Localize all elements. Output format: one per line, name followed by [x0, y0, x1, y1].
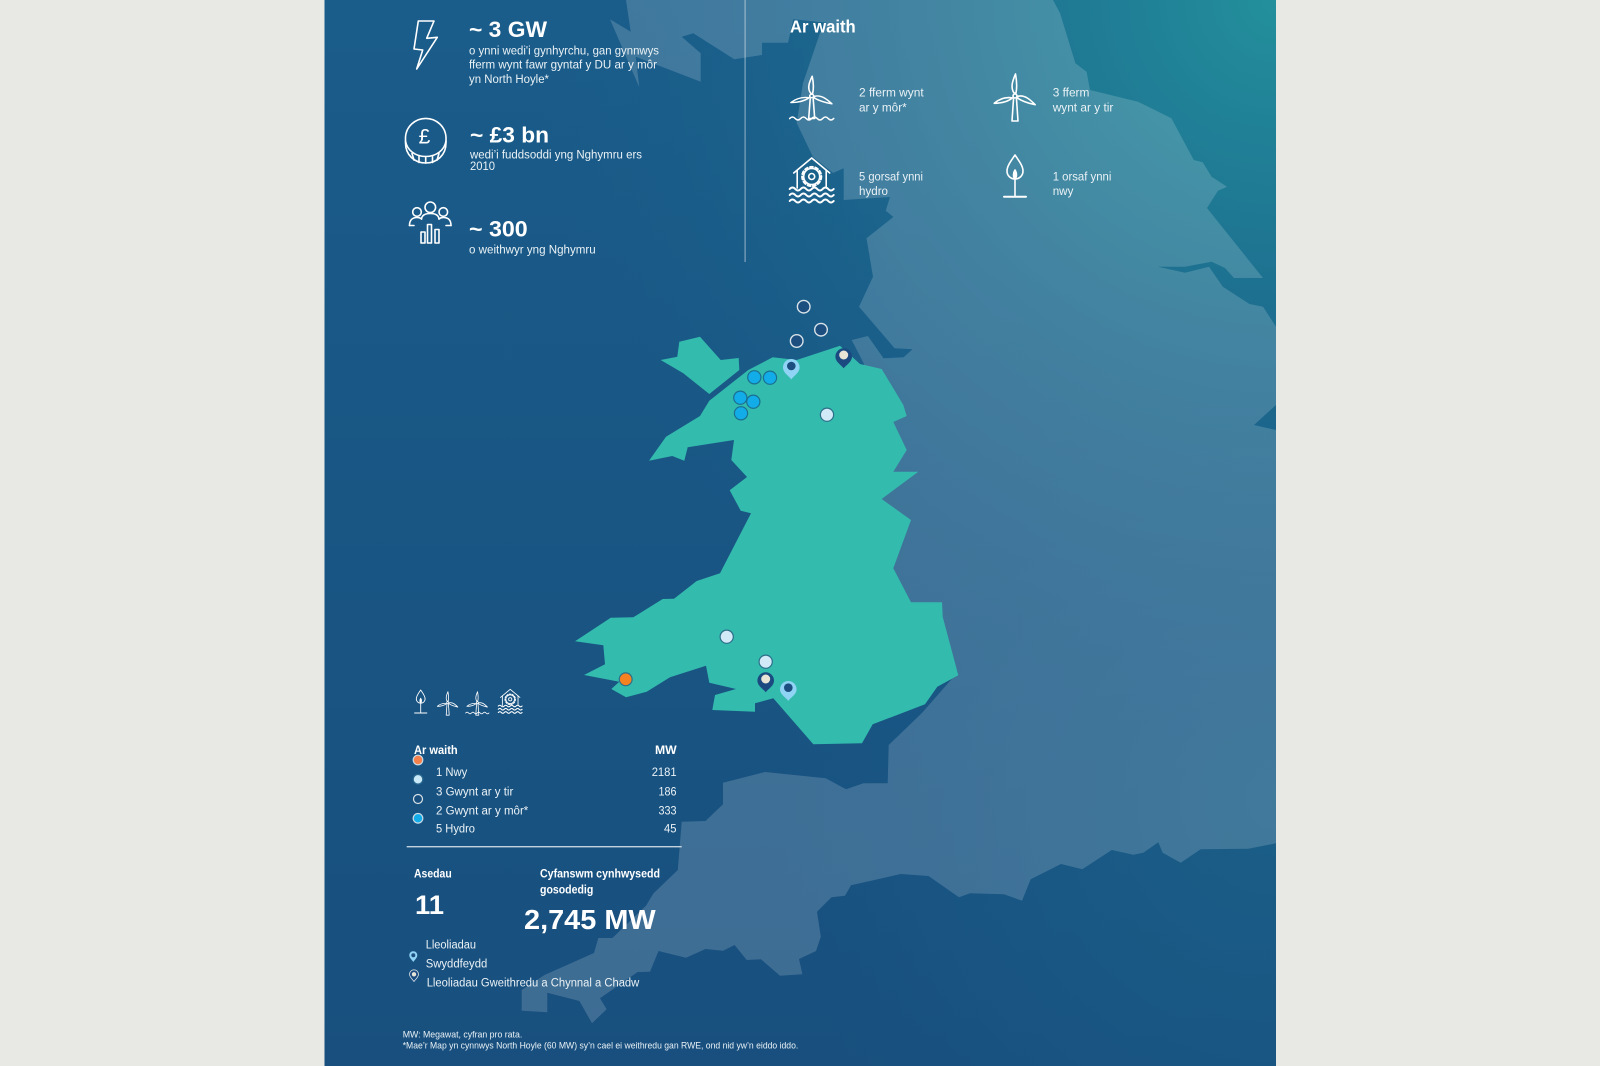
label: hydro: hydro: [859, 184, 888, 198]
totals: assets: [414, 868, 452, 920]
label: hydro: 5 gorsaf ynni: [859, 169, 923, 183]
icon: offshore turbine: [790, 76, 834, 120]
legend MW values: 45: [664, 824, 676, 836]
assets value: 11: [415, 890, 444, 920]
key pin: offices: [409, 951, 417, 962]
map pin: office north: [783, 359, 800, 380]
heading: Ar waith: Ar waith: [790, 16, 856, 36]
stat description: investment: 2010: [470, 159, 495, 173]
legend row labels: 3 Gwynt ar y tir: [436, 786, 513, 798]
icon: pound coin: [406, 118, 446, 163]
label: onshore wind: 3 fferm: [1053, 86, 1089, 100]
key labels: Lleoliadau: [426, 939, 476, 951]
map: Wales mainland: [575, 346, 958, 744]
stat description: investment: wedi’i fuddsoddi yng Nghymru ers: [469, 147, 642, 161]
legend colour dots: [413, 755, 423, 823]
stat description: energy: fferm wynt fawr gyntaf y DU ar y môr: [469, 58, 657, 72]
label: gas: 1 orsaf ynni: [1053, 169, 1111, 183]
stat description: workers: o weithwyr yng Nghymru: [469, 242, 596, 256]
legend row labels: 2 Gwynt ar y môr*: [436, 805, 529, 817]
legend MW values: 2181: [652, 767, 677, 779]
legend MW values: 333: [658, 805, 676, 817]
map: Anglesey: [661, 337, 739, 394]
map markers: hydro stations: [734, 371, 777, 420]
totals: installed capacity: [524, 868, 660, 935]
legend MW heading: MW: [655, 745, 677, 757]
asset: onshore wind: [994, 74, 1113, 121]
key labels: Swyddfeydd: [426, 959, 487, 971]
label: offshore wind: ar y môr*: [859, 101, 907, 115]
icon: hydro station: [790, 158, 834, 202]
asset: offshore wind: [790, 76, 924, 120]
footnotes: *Mae’r Map yn cynnwys North Hoyle (60 MW) sy’n cael ei weithredu gan RWE, ond nid yw’n eiddo iddo.: [403, 1041, 798, 1051]
asset: gas: [1004, 155, 1111, 198]
legend heading: Ar waith: [414, 745, 458, 757]
capacity label: gosodedig: [540, 884, 593, 896]
legend table: [413, 745, 677, 836]
map markers: offshore wind farms: [790, 300, 827, 347]
assets label: Asedau: [414, 868, 452, 880]
map pin: office south: [780, 681, 797, 701]
legend row labels: 1 Nwy: [436, 767, 468, 779]
legend icons row: [415, 689, 522, 715]
icon: people and bars: [410, 202, 451, 243]
stat description: energy: yn North Hoyle*: [469, 72, 549, 86]
key labels: Lleoliadau Gweithredu a Chynnal a Chadw: [427, 978, 640, 990]
stat: workers: [410, 202, 596, 256]
capacity label: Cyfanswm cynhwysedd: [540, 868, 660, 880]
icon: onshore turbine: [994, 74, 1037, 121]
icon: lightning bolt: [414, 21, 437, 69]
stat description: energy: o ynni wedi'i gynhyrchu, gan gynnwys: [469, 44, 659, 58]
map pin: operations north: [835, 348, 852, 368]
asset: hydro: [790, 158, 923, 202]
legend divider: [407, 846, 682, 847]
footnotes: MW: Megawat, cyfran pro rata.: [403, 1030, 522, 1040]
panel: map background: [324, 0, 1276, 1066]
icon: gas flame: [1004, 155, 1026, 197]
map pin: operations south: [757, 672, 774, 692]
capacity value: 2,745 MW: [524, 904, 656, 935]
vertical divider: [744, 0, 746, 262]
legend row labels: 5 Hydro: [436, 824, 475, 836]
map: England and neighbouring land: [522, 0, 1276, 1023]
label: gas: nwy: [1053, 184, 1074, 198]
map marker: gas station: [619, 673, 632, 686]
key pin: operations: [410, 970, 418, 982]
map markers: onshore wind farms: [720, 408, 834, 668]
icon: pound coin: £: [419, 126, 431, 148]
location key: [409, 939, 640, 990]
stat: investment: [406, 118, 642, 173]
stat value: 3 bn: ~ £3 bn: [470, 123, 549, 148]
legend MW values: 186: [658, 786, 676, 798]
label: onshore wind: wynt ar y tir: [1052, 101, 1113, 115]
stat: energy generated: [414, 17, 659, 86]
stat value: 3 GW: ~ 3 GW: [469, 17, 547, 42]
stat value: 300: ~ 300: [469, 217, 528, 242]
label: offshore wind: 2 fferm wynt: [859, 86, 924, 100]
